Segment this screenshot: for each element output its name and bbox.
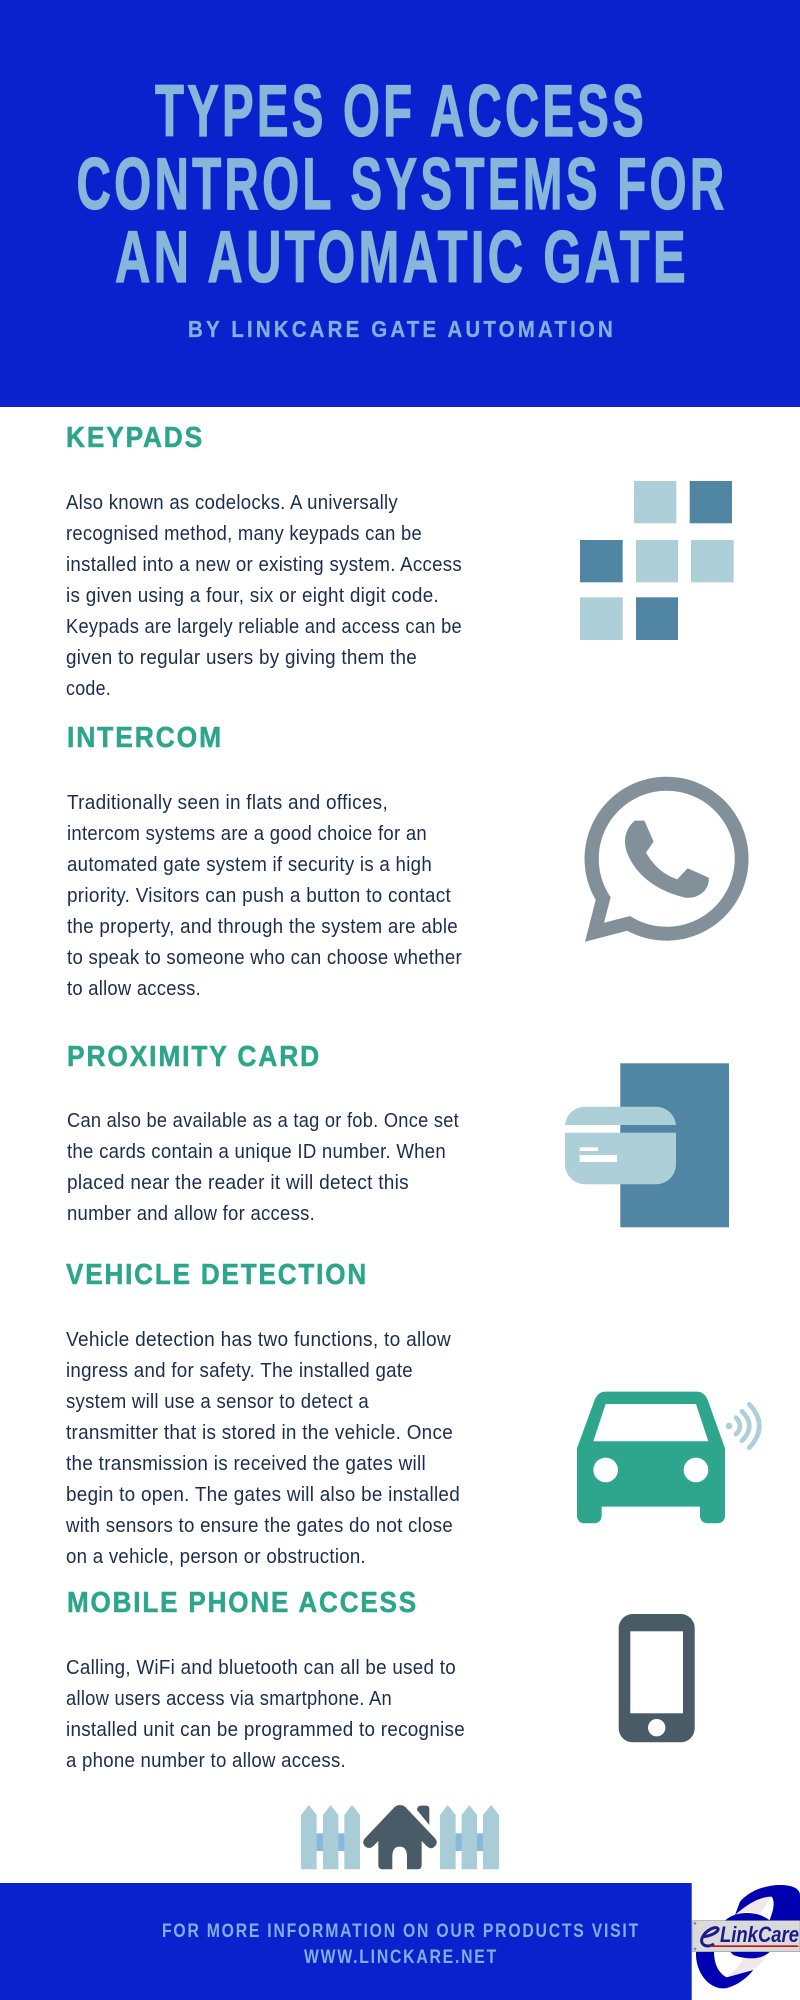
- text block: vehicle detection: ingress and for safety. The installed gate: [66, 1359, 413, 1382]
- heading: mobile phone access: MOBILE PHONE ACCESS: [67, 1587, 418, 1619]
- text block: mobile phone access: Calling, WiFi and bluetooth can all be used to: [66, 1656, 456, 1679]
- text block: keypads: installed into a new or existing system. Access: [66, 553, 462, 576]
- text block: vehicle detection: on a vehicle, person or obstruction.: [66, 1545, 366, 1568]
- text block: intercom: to speak to someone who can choose whether: [67, 946, 462, 969]
- text block: vehicle detection: the transmission is received the gates will: [66, 1452, 426, 1475]
- panel: intercom: [67, 722, 749, 1000]
- text block: proximity card: the cards contain a unique ID number. When: [67, 1140, 446, 1163]
- text block: vehicle detection: transmitter that is stored in the vehicle. Once: [66, 1421, 453, 1444]
- text block: vehicle detection: begin to open. The gates will also be installed: [66, 1483, 460, 1506]
- text block: mobile phone access: [66, 1656, 465, 1772]
- heading: keypads: KEYPADS: [66, 422, 204, 454]
- text block: proximity card: [67, 1109, 459, 1225]
- heading: intercom: INTERCOM: [67, 722, 223, 754]
- text block: mobile phone access: allow users access via smartphone. An: [66, 1687, 392, 1710]
- title: [76, 71, 728, 298]
- heading: proximity card: PROXIMITY CARD: [67, 1041, 321, 1073]
- text block: keypads: Also known as codelocks. A universally: [66, 491, 398, 514]
- logo: LinkCare: [693, 1885, 800, 1988]
- text block: proximity card: number and allow for access.: [67, 1202, 315, 1225]
- text block: proximity card: Can also be available as a tag or fob. Once set: [67, 1109, 459, 1132]
- text block: intercom: [67, 791, 462, 1000]
- text block: keypads: Keypads are largely reliable and access can be: [66, 615, 462, 638]
- footer text: FOR MORE INFORMATION ON OUR PRODUCTS VISIT: [162, 1920, 640, 1942]
- panel: proximity card: [67, 1041, 729, 1227]
- footer text: WWW.LINCKARE.NET: [304, 1946, 498, 1968]
- text block: keypads: code.: [66, 677, 111, 700]
- text block: intercom: automated gate system if security is a high: [67, 853, 432, 876]
- text block: intercom: Traditionally seen in flats and offices,: [67, 791, 388, 814]
- subtitle: BY LINKCARE GATE AUTOMATION: [188, 316, 616, 342]
- panel: mobile phone access: [66, 1587, 695, 1772]
- heading: vehicle detection: VEHICLE DETECTION: [66, 1259, 368, 1291]
- text block: keypads: recognised method, many keypads can be: [66, 522, 422, 545]
- icon: house with fence: [301, 1805, 499, 1869]
- text block: intercom: the property, and through the system are able: [67, 915, 458, 938]
- panel: keypads: [66, 422, 734, 700]
- text block: vehicle detection: Vehicle detection has two functions, to allow: [66, 1328, 451, 1351]
- panel: vehicle detection: [65, 1259, 759, 1568]
- text block: intercom: intercom systems are a good choice for an: [67, 822, 427, 845]
- text block: vehicle detection: with sensors to ensure the gates do not close: [65, 1514, 453, 1537]
- footer text: [162, 1920, 640, 1968]
- footer banner: [0, 1883, 692, 2000]
- text block: intercom: to allow access.: [67, 977, 201, 1000]
- text block: vehicle detection: system will use a sensor to detect a: [66, 1390, 369, 1413]
- text block: mobile phone access: a phone number to allow access.: [66, 1749, 346, 1772]
- text block: mobile phone access: installed unit can be programmed to recognise: [66, 1718, 465, 1741]
- icon: keypad squares: [580, 481, 734, 640]
- text block: vehicle detection: [65, 1328, 460, 1568]
- icon: card and reader: [565, 1063, 729, 1227]
- icon: chat bubble with phone: [585, 777, 749, 942]
- icon: car with signal: [577, 1392, 759, 1523]
- icon: smartphone: [619, 1614, 695, 1742]
- text block: intercom: priority. Visitors can push a button to contact: [67, 884, 451, 907]
- text block: keypads: given to regular users by giving them the: [66, 646, 417, 669]
- header banner: [0, 0, 800, 407]
- text block: keypads: [66, 491, 462, 700]
- text block: keypads: is given using a four, six or eight digit code.: [66, 584, 439, 607]
- text block: proximity card: placed near the reader it will detect this: [67, 1171, 409, 1194]
